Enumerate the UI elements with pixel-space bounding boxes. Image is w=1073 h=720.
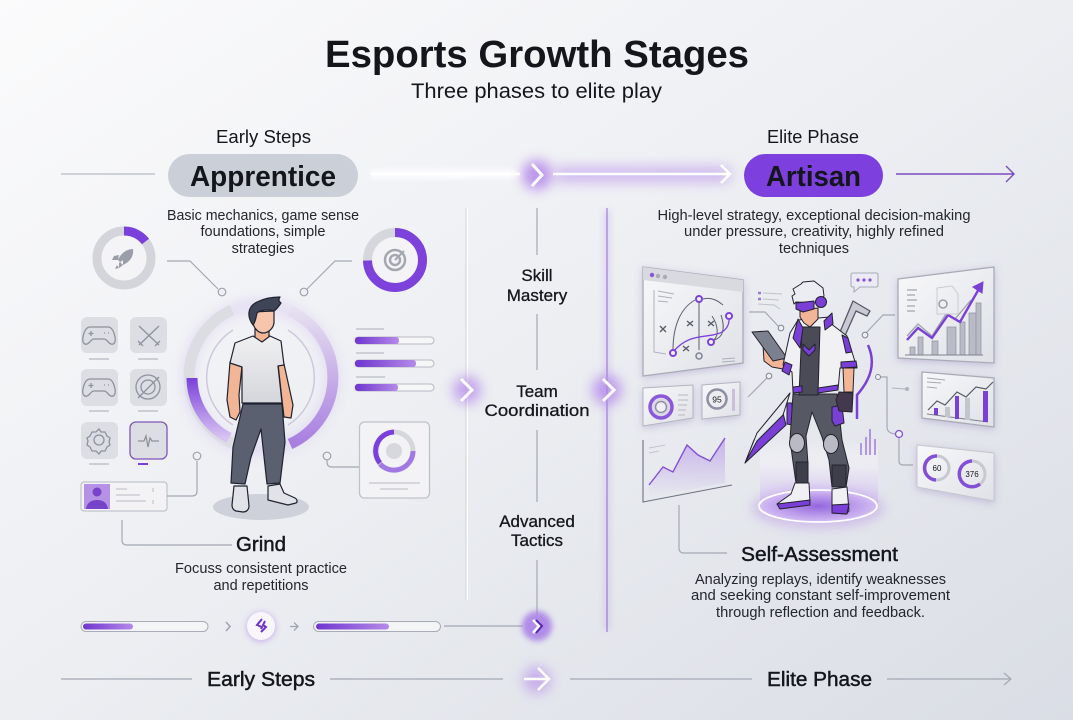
dual gauge panel [917,445,994,501]
bottom label: Elite Phase: Elite Phase [767,669,872,691]
central labels: Skill Mastery: Skill [521,266,553,285]
Artisan pill: Artisan [766,161,861,193]
bottom label: Early Steps: Early Steps [207,669,315,691]
mini donut panel [643,385,693,426]
trend chart panel [922,372,994,427]
Apprentice figure rings [188,305,333,449]
skill bars [355,329,434,391]
skill icon grid [81,317,167,464]
Apprentice pill: Apprentice [190,161,336,193]
chat bubble [851,273,878,292]
icon: target progress ring [368,232,422,288]
right header arrow [896,166,1014,182]
Self-Assessment description: and seeking constant self-improvement [691,588,950,604]
stage label: Elite Phase: Elite Phase [767,127,859,147]
connectors to rings [167,261,352,296]
Grind description [175,561,347,594]
connectors around Artisan [748,293,913,465]
Artisan pill [744,154,883,197]
subtitle: Three phases to elite play [411,80,663,103]
Artisan platform [752,440,884,528]
purple arc [857,345,872,419]
Apprentice pill [168,154,358,197]
central labels: Skill Mastery: Mastery [507,286,568,305]
central labels: Advanced Tactics [499,512,575,550]
mini signal bars [861,429,875,455]
connector: donut card [323,452,359,467]
Artisan figure [745,281,870,514]
title: Esports Growth Stages [325,34,749,76]
central labels: Skill Mastery [507,266,568,305]
tactics board [643,267,743,376]
Apprentice description: Basic mechanics, game sense [167,208,359,224]
central labels: Advanced Tactics: Advanced [499,512,575,531]
profile card [81,482,167,511]
glowing arrow from Apprentice to Artisan [371,160,730,190]
Grind description: and repetitions [213,578,309,594]
Apprentice description: foundations, simple [201,224,325,240]
connector to Grind [122,520,232,545]
central labels: Team Coordination: Coordination [484,401,590,420]
chevron node [522,611,552,641]
score panel 95: 95 [712,394,722,404]
dual gauge panel: 60 [933,464,942,473]
dual gauge panel: 376 [965,470,979,479]
left header line [61,173,155,175]
Apprentice description [167,208,359,257]
chevron: left column [453,376,481,404]
connector to Self-Assessment [679,505,727,553]
Apprentice figure [213,297,309,520]
Apprentice description: strategies [232,241,294,257]
Self-Assessment description: through reflection and feedback. [716,605,925,621]
Artisan description: techniques [779,241,849,257]
bottom arrow [523,666,551,694]
area chart [643,438,732,502]
Self-Assessment heading: Self-Assessment [741,544,898,566]
Grind heading: Grind [236,534,286,556]
central labels: Team Coordination: Team [516,382,558,401]
central labels: Advanced Tactics: Tactics [511,531,563,550]
Self-Assessment description: Analyzing replays, identify weaknesses [695,572,946,588]
donut card [360,422,430,498]
Grind description: Focuss consistent practice [175,561,347,577]
score panel 95 [702,382,740,419]
connector: profile card [167,452,201,496]
central labels: Team Coordination [484,382,590,420]
chevron: right column [592,375,622,405]
bottom progress row [81,612,523,642]
growth chart panel [898,267,994,363]
Self-Assessment description [691,572,950,621]
Artisan description [658,208,970,257]
central column dividers [466,208,611,632]
Artisan description: High-level strategy, exceptional decision-making [658,208,970,224]
icon: rocket progress ring [97,231,151,285]
bottom timeline lines [61,673,1011,685]
Artisan description: under pressure, creativity, highly refined [684,224,944,240]
stage label: Early Steps: Early Steps [216,127,311,147]
